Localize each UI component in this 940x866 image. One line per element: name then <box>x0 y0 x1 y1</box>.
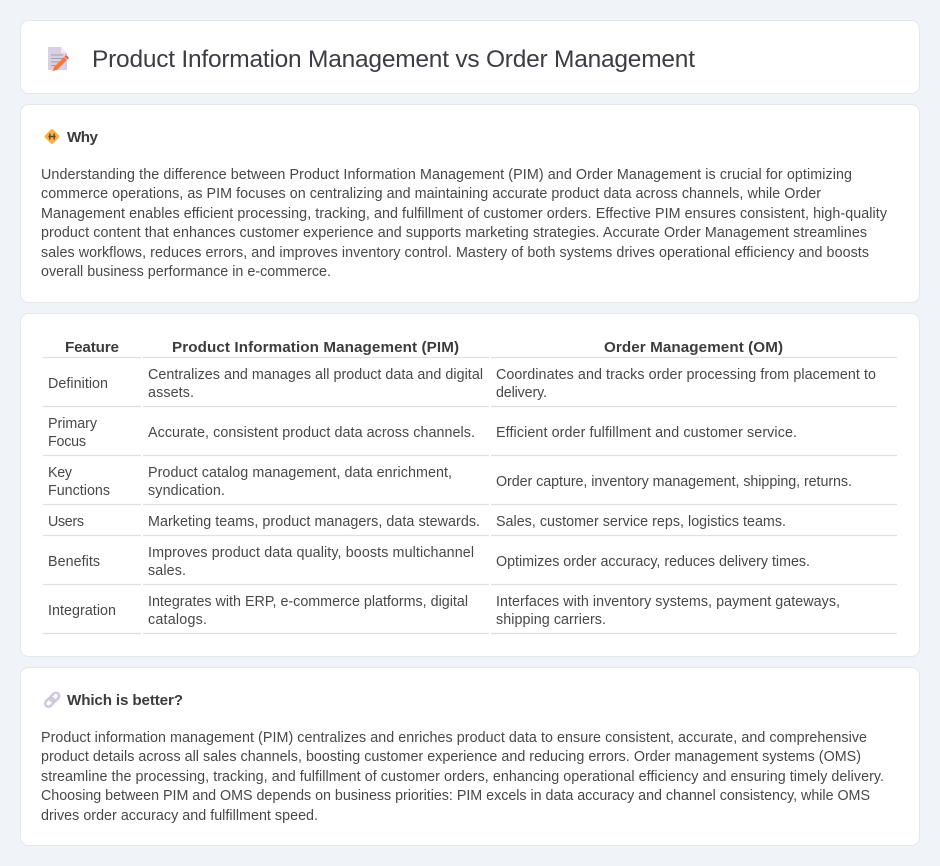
row: definition: Coordinates and tracks order processing from placement to <box>496 367 876 383</box>
row: benefits <box>48 545 810 579</box>
why text block: sales workflows, reduces errors, and improves inventory control. Mastery of both systems drives operational efficiency and boosts <box>41 245 869 261</box>
row: key functions: Product catalog management, data enrichment, <box>148 465 452 481</box>
row: benefits: sales. <box>148 563 186 579</box>
panel: comparison table <box>20 314 920 656</box>
row: benefits: Benefits <box>48 554 100 570</box>
table header row: Product Information Management (PIM) <box>172 339 459 356</box>
row: definition: Definition <box>48 376 108 392</box>
row: primary focus: Accurate, consistent product data across channels. <box>148 425 475 441</box>
row: users: Marketing teams, product managers, data stewards. <box>148 514 480 530</box>
panel: why <box>20 104 920 302</box>
row: users <box>48 514 786 530</box>
row: integration: Interfaces with inventory systems, payment gateways, <box>496 594 840 610</box>
which is better text block: product details across all sales channels, boosting customer experience and reducing errors. Order management systems (OMS) <box>41 749 861 765</box>
icon: document with pencil <box>48 47 69 71</box>
row: integration: Integrates with ERP, e-commerce platforms, digital <box>148 594 468 610</box>
row: primary focus: Focus <box>48 434 86 450</box>
row: definition: assets. <box>148 385 194 401</box>
row: primary focus <box>48 416 797 450</box>
row: key functions: Key <box>48 465 73 481</box>
row: definition: delivery. <box>496 385 547 401</box>
table header row: Feature <box>65 339 119 356</box>
icon: warning diamond <box>44 128 60 145</box>
why text block: overall business performance in e-commerce. <box>41 264 331 280</box>
row: key functions: syndication. <box>148 483 225 499</box>
which is better text block: streamline the processing, tracking, and fulfillment of customer orders, enhancing operational efficiency and ensuring timely delivery. <box>41 769 884 785</box>
row: definition: Centralizes and manages all product data and digital <box>148 367 483 383</box>
which is better text block: drives order accuracy and fulfillment speed. <box>41 808 318 824</box>
panel: header <box>20 20 920 94</box>
which is better text block <box>41 730 884 824</box>
table header row: Order Management (OM) <box>604 339 783 356</box>
row: integration <box>48 594 840 628</box>
row: primary focus: Primary <box>48 416 98 432</box>
row: integration: Integration <box>48 603 116 619</box>
title: Product Information Management vs Order Management <box>92 46 695 73</box>
row: users: Users <box>48 514 84 530</box>
which is better text block: Choosing between PIM and OMS depends on business priorities: PIM excels in data accuracy and channel consistency, while OMS <box>41 788 870 804</box>
table header row <box>65 339 783 356</box>
row: integration: catalogs. <box>148 612 207 628</box>
row: integration: shipping carriers. <box>496 612 606 628</box>
heading: which is better: Which is better? <box>67 692 183 709</box>
row: key functions <box>48 465 852 499</box>
row: benefits: Optimizes order accuracy, reduces delivery times. <box>496 554 810 570</box>
row: benefits: Improves product data quality, boosts multichannel <box>148 545 474 561</box>
row: primary focus: Efficient order fulfillment and customer service. <box>496 425 797 441</box>
why text block: product content that enhances customer experience and supports marketing strategies. Accurate Order Management streamlines <box>41 225 867 241</box>
row: users: Sales, customer service reps, logistics teams. <box>496 514 786 530</box>
which is better text block: Product information management (PIM) centralizes and enriches product data to ensure consistent, accurate, and comprehensive <box>41 730 867 746</box>
why text block: Management enables efficient processing, tracking, and fulfillment of customer orders. Effective PIM ensures consistent, high-quality <box>41 206 888 222</box>
panel: which is better <box>20 668 920 846</box>
row: key functions: Functions <box>48 483 110 499</box>
row: definition <box>48 367 876 401</box>
row: key functions: Order capture, inventory management, shipping, returns. <box>496 474 852 490</box>
why text block: commerce operations, as PIM focuses on centralizing and maintaining accurate product data across channels, while Order <box>41 186 821 202</box>
heading: why: Why <box>67 129 99 146</box>
why text block <box>41 167 888 280</box>
why text block: Understanding the difference between Product Information Management (PIM) and Order Management is crucial for optimizing <box>41 167 852 183</box>
icon: link <box>44 691 61 708</box>
